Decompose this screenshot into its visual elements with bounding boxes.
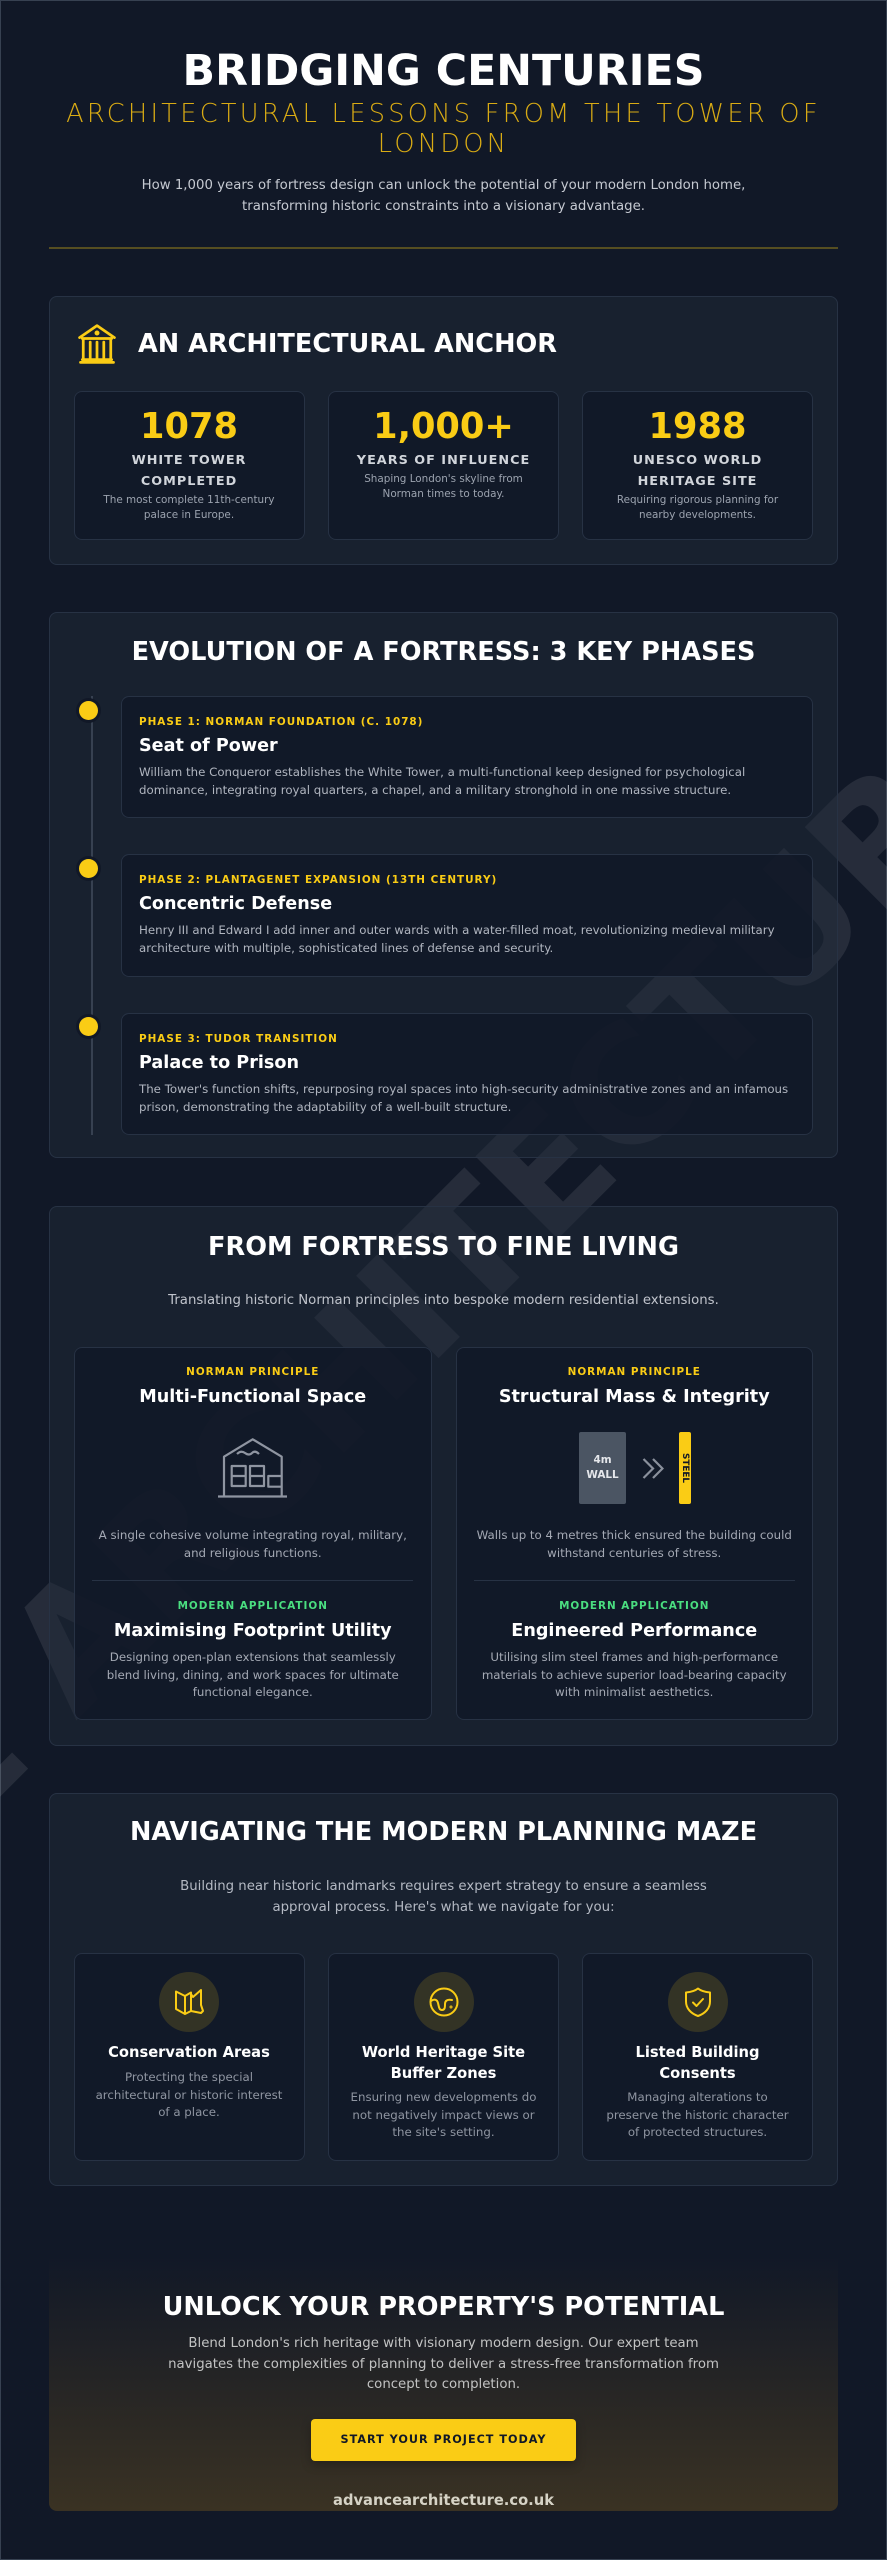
phase label: PHASE 1: NORMAN FOUNDATION (C. 1078) xyxy=(139,716,423,728)
phase description: William the Conqueror establishes the White Tower, a multi-functional keep designed for psychological xyxy=(139,765,745,779)
planning card: conservation areas xyxy=(74,1953,304,2161)
phase description xyxy=(139,765,745,797)
wall block xyxy=(579,1432,626,1504)
stat card: 1,000+ xyxy=(328,391,559,540)
stat label: UNESCO WORLD xyxy=(633,453,762,468)
card description: preserve the historic character xyxy=(606,2108,789,2122)
intro text: transforming historic constraints into a visionary advantage. xyxy=(242,199,645,214)
norman description xyxy=(98,1528,407,1560)
icon: shield check xyxy=(668,1972,728,2032)
comparison card: multi-functional space xyxy=(74,1347,432,1720)
card description: not negatively impact views or xyxy=(352,2108,535,2122)
wall block: WALL xyxy=(586,1469,619,1481)
card description: of a place. xyxy=(158,2105,220,2119)
phase card 3 xyxy=(121,1013,813,1135)
modern description xyxy=(482,1650,787,1699)
panel: evolution of a fortress xyxy=(49,612,838,1158)
wall block: 4m xyxy=(593,1454,612,1466)
icon: circle with wave xyxy=(414,1972,474,2032)
section intro: Translating historic Norman principles into bespoke modern residential extensions. xyxy=(168,1293,719,1308)
modern description: materials to achieve superior load-bearing capacity xyxy=(482,1668,787,1682)
intro text: How 1,000 years of fortress design can unlock the potential of your modern London home, xyxy=(142,178,745,193)
section intro xyxy=(180,1879,707,1915)
steel beam xyxy=(679,1432,691,1504)
modern description: Designing open-plan extensions that seamlessly xyxy=(110,1650,396,1664)
stat description: nearby developments. xyxy=(639,508,756,520)
card title: Consents xyxy=(659,2065,736,2082)
phase title: Concentric Defense xyxy=(139,894,332,914)
section heading: EVOLUTION OF A FORTRESS: 3 KEY PHASES xyxy=(132,637,755,667)
modern description: functional elegance. xyxy=(193,1685,313,1699)
norman description: Walls up to 4 metres thick ensured the building could xyxy=(477,1528,792,1542)
card description xyxy=(351,2090,536,2139)
norman description: and religious functions. xyxy=(184,1546,322,1560)
stat description xyxy=(617,494,778,520)
modern title: Engineered Performance xyxy=(511,1621,757,1641)
stat description: Norman times to today. xyxy=(383,488,504,500)
section heading: NAVIGATING THE MODERN PLANNING MAZE xyxy=(130,1817,757,1847)
card description: the site's setting. xyxy=(392,2125,495,2139)
phase description xyxy=(138,1082,788,1114)
norman description: A single cohesive volume integrating royal, military, xyxy=(99,1528,407,1542)
stat description xyxy=(103,494,275,520)
section heading: FROM FORTRESS TO FINE LIVING xyxy=(208,1232,679,1262)
card title xyxy=(636,2044,759,2082)
phase card 2 xyxy=(121,854,813,977)
planning card: listed building consents xyxy=(582,1953,813,2161)
section intro: Building near historic landmarks requires expert strategy to ensure a seamless xyxy=(180,1879,707,1894)
header subtitle: LONDON xyxy=(378,129,509,159)
timeline dot 1 xyxy=(79,701,98,720)
intro text xyxy=(142,178,745,214)
modern description: with minimalist aesthetics. xyxy=(555,1685,713,1699)
stat label xyxy=(132,453,246,489)
card title: World Heritage Site xyxy=(362,2044,525,2061)
norman description xyxy=(477,1528,792,1560)
header subtitle: ARCHITECTURAL LESSONS FROM THE TOWER OF xyxy=(66,99,821,129)
cta button xyxy=(311,2419,576,2461)
section intro: approval process. Here's what we navigate for you: xyxy=(272,1900,615,1915)
stat description: The most complete 11th-century xyxy=(103,494,275,506)
timeline dot 2 xyxy=(79,859,98,878)
phase label: PHASE 2: PLANTAGENET EXPANSION (13TH CENTURY) xyxy=(139,874,497,886)
stat card: 1078 xyxy=(74,391,304,540)
panel: navigating the planning maze xyxy=(49,1793,838,2186)
icon: house floor plan xyxy=(218,1438,287,1498)
stat number: 1988 xyxy=(649,406,746,447)
stat number: 1078 xyxy=(140,406,238,447)
icon: classical building xyxy=(78,324,116,364)
modern label: MODERN APPLICATION xyxy=(178,1600,328,1612)
modern description xyxy=(107,1650,399,1699)
stat label: HERITAGE SITE xyxy=(638,474,757,489)
card title: Buffer Zones xyxy=(391,2065,496,2082)
norman description: withstand centuries of stress. xyxy=(547,1546,721,1560)
cta text: Blend London's rich heritage with visionary modern design. Our expert team xyxy=(188,2336,699,2351)
icon: double chevron xyxy=(642,1458,664,1479)
card description xyxy=(606,2090,789,2139)
phase description: architecture with multiple, sophisticated lines of defense and security. xyxy=(139,941,553,955)
cta text xyxy=(168,2336,719,2392)
phase description: Henry III and Edward I add inner and outer wards with a water-filled moat, revolutionizing medieval military xyxy=(139,923,775,937)
stat description xyxy=(364,472,523,500)
panel: an architectural anchor xyxy=(49,296,838,565)
card description: Protecting the special xyxy=(125,2070,253,2084)
icon: map xyxy=(159,1972,219,2032)
phase title: Palace to Prison xyxy=(139,1053,299,1073)
phase description xyxy=(139,923,775,955)
norman label: NORMAN PRINCIPLE xyxy=(186,1366,319,1378)
section heading: AN ARCHITECTURAL ANCHOR xyxy=(138,329,557,359)
comparison card: structural mass xyxy=(456,1347,813,1720)
card title xyxy=(362,2044,525,2082)
panel: call to action xyxy=(49,2234,838,2511)
card description: Ensuring new developments do xyxy=(351,2090,536,2104)
norman title: Structural Mass & Integrity xyxy=(499,1387,770,1407)
panel: from fortress to fine living xyxy=(49,1206,838,1746)
stat number: 1,000+ xyxy=(373,406,514,447)
phase description: dominance, integrating royal quarters, a chapel, and a military stronghold in one massive structure. xyxy=(139,783,731,797)
cta text: concept to completion. xyxy=(367,2377,520,2392)
stat label: WHITE TOWER xyxy=(132,453,246,468)
card description xyxy=(96,2070,282,2119)
stat label: YEARS OF INFLUENCE xyxy=(357,453,530,468)
phase title: Seat of Power xyxy=(139,736,278,756)
card description: architectural or historic interest xyxy=(96,2088,282,2102)
stat card: 1988 xyxy=(582,391,813,540)
modern description: Utilising slim steel frames and high-performance xyxy=(490,1650,778,1664)
planning card: buffer zones xyxy=(328,1953,559,2161)
steel label: STEEL xyxy=(680,1453,690,1483)
norman title: Multi-Functional Space xyxy=(139,1387,366,1407)
stat label: COMPLETED xyxy=(141,474,237,489)
phase description: prison, demonstrating the adaptability of a well-built structure. xyxy=(139,1100,511,1114)
card description: of protected structures. xyxy=(628,2125,767,2139)
stat label xyxy=(633,453,762,489)
modern label: MODERN APPLICATION xyxy=(559,1600,709,1612)
stat description: Requiring rigorous planning for xyxy=(617,494,778,506)
website url: advancearchitecture.co.uk xyxy=(333,2492,554,2509)
timeline dot 3 xyxy=(79,1017,98,1036)
card title: Conservation Areas xyxy=(108,2044,270,2061)
cta heading: UNLOCK YOUR PROPERTY'S POTENTIAL xyxy=(163,2292,724,2322)
phase label: PHASE 3: TUDOR TRANSITION xyxy=(139,1033,338,1045)
header subtitle xyxy=(66,99,821,159)
phase card 1 xyxy=(121,696,813,818)
phase description: The Tower's function shifts, repurposing royal spaces into high-security administrative zones and an infamous xyxy=(139,1082,788,1096)
header title: BRIDGING CENTURIES xyxy=(183,46,704,96)
header divider xyxy=(49,247,838,249)
cta text: navigates the complexities of planning to deliver a stress-free transformation from xyxy=(168,2357,719,2372)
card title: Listed Building xyxy=(636,2044,759,2061)
timeline line xyxy=(90,696,92,1135)
norman label: NORMAN PRINCIPLE xyxy=(568,1366,701,1378)
cta button: START YOUR PROJECT TODAY xyxy=(341,2433,546,2446)
card description: Managing alterations to xyxy=(627,2090,768,2104)
modern description: blend living, dining, and work spaces for ultimate xyxy=(107,1668,399,1682)
stat description: palace in Europe. xyxy=(144,508,234,520)
stat description: Shaping London's skyline from xyxy=(364,472,523,484)
modern title: Maximising Footprint Utility xyxy=(114,1621,392,1641)
